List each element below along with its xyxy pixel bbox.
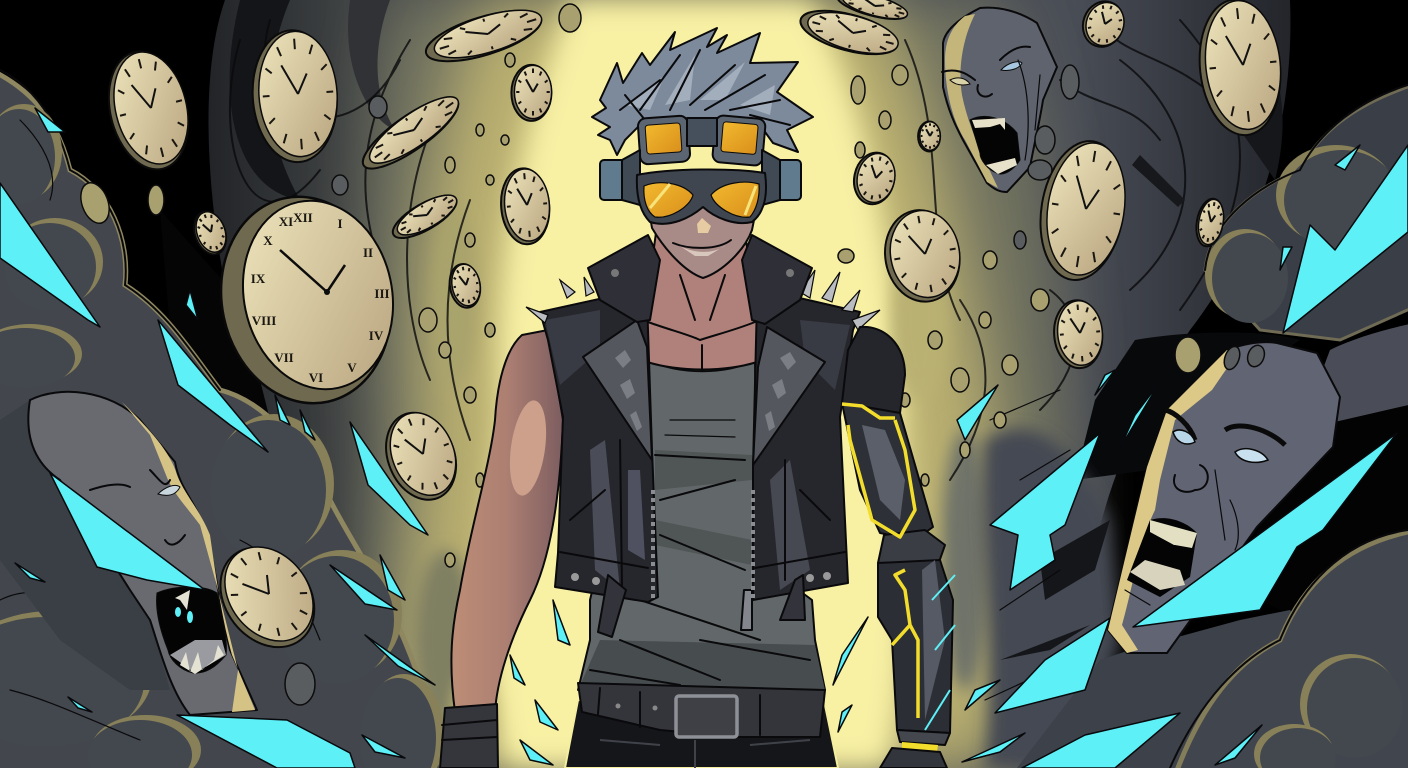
monster face: left	[0, 392, 257, 715]
arm highlight	[504, 398, 552, 498]
character	[440, 28, 955, 768]
clock	[1193, 197, 1227, 248]
clock	[97, 43, 200, 178]
right storm clouds	[1000, 80, 1408, 768]
nose and smile	[673, 218, 731, 256]
big roman numeral clock: VII	[274, 350, 294, 365]
left muscular arm	[451, 330, 563, 712]
lower goggles	[637, 169, 766, 224]
vortex swirl strokes	[160, 0, 1408, 620]
clock	[374, 402, 469, 510]
tank top shading	[578, 420, 825, 690]
big roman numeral clock: V	[347, 360, 357, 375]
left storm clouds	[0, 65, 445, 768]
clock	[498, 166, 553, 246]
right lapel	[753, 327, 825, 465]
background: olive haze	[363, 0, 1073, 768]
upper goggles	[637, 115, 766, 166]
clock	[511, 65, 552, 121]
jacket highlights	[545, 310, 850, 637]
monster face: upper right	[942, 8, 1079, 192]
clock	[421, 0, 547, 72]
big roman numeral clock: VIII	[252, 313, 276, 328]
lapels	[583, 320, 652, 460]
clock	[835, 0, 910, 25]
monster face: right	[1108, 342, 1340, 653]
clock	[1031, 135, 1134, 286]
big roman numeral clock: I	[337, 216, 343, 231]
high collar	[588, 235, 812, 324]
floating rocks	[76, 4, 1201, 705]
clock	[446, 262, 484, 310]
shoulder spikes	[526, 270, 880, 330]
clock	[849, 149, 899, 208]
background: pale yellow light column	[488, 0, 909, 768]
clock	[201, 529, 334, 666]
belt	[578, 683, 825, 737]
clock	[1193, 0, 1287, 139]
clock	[878, 204, 967, 308]
clock	[796, 2, 902, 63]
cyborg arm	[842, 327, 955, 768]
big roman numeral clock: X	[263, 233, 273, 248]
big roman numeral clock: IV	[369, 328, 384, 343]
tank top	[578, 360, 825, 690]
jeans	[565, 700, 838, 768]
clock	[1077, 0, 1130, 53]
face	[648, 205, 757, 278]
ear cans	[600, 150, 801, 205]
clock	[1051, 298, 1105, 370]
big roman numeral clock: VI	[309, 370, 323, 385]
clock	[387, 187, 463, 246]
flying clocks	[97, 0, 1287, 666]
yellow circuit lines	[842, 404, 918, 718]
right jacket panel	[753, 290, 860, 600]
lower right dark streaks	[983, 390, 1120, 768]
glove	[440, 704, 498, 768]
big roman numeral clock: II	[363, 245, 373, 260]
big roman numeral clock: XII	[293, 210, 313, 225]
clock	[354, 86, 467, 180]
clock	[188, 207, 232, 259]
clock	[248, 27, 342, 165]
clock	[918, 121, 940, 151]
big roman numeral clock	[202, 181, 410, 419]
hair	[592, 28, 813, 155]
chest skin and neck	[647, 225, 757, 370]
mottled patches in the glow	[415, 210, 989, 768]
big roman numeral clock: III	[374, 286, 390, 301]
background: swirling vortex	[209, 0, 1290, 768]
background: ochre glow	[400, 0, 1006, 768]
left jacket panel	[540, 290, 658, 602]
big roman numeral clock: XI	[279, 214, 293, 229]
big roman numeral clock: IX	[251, 271, 266, 286]
